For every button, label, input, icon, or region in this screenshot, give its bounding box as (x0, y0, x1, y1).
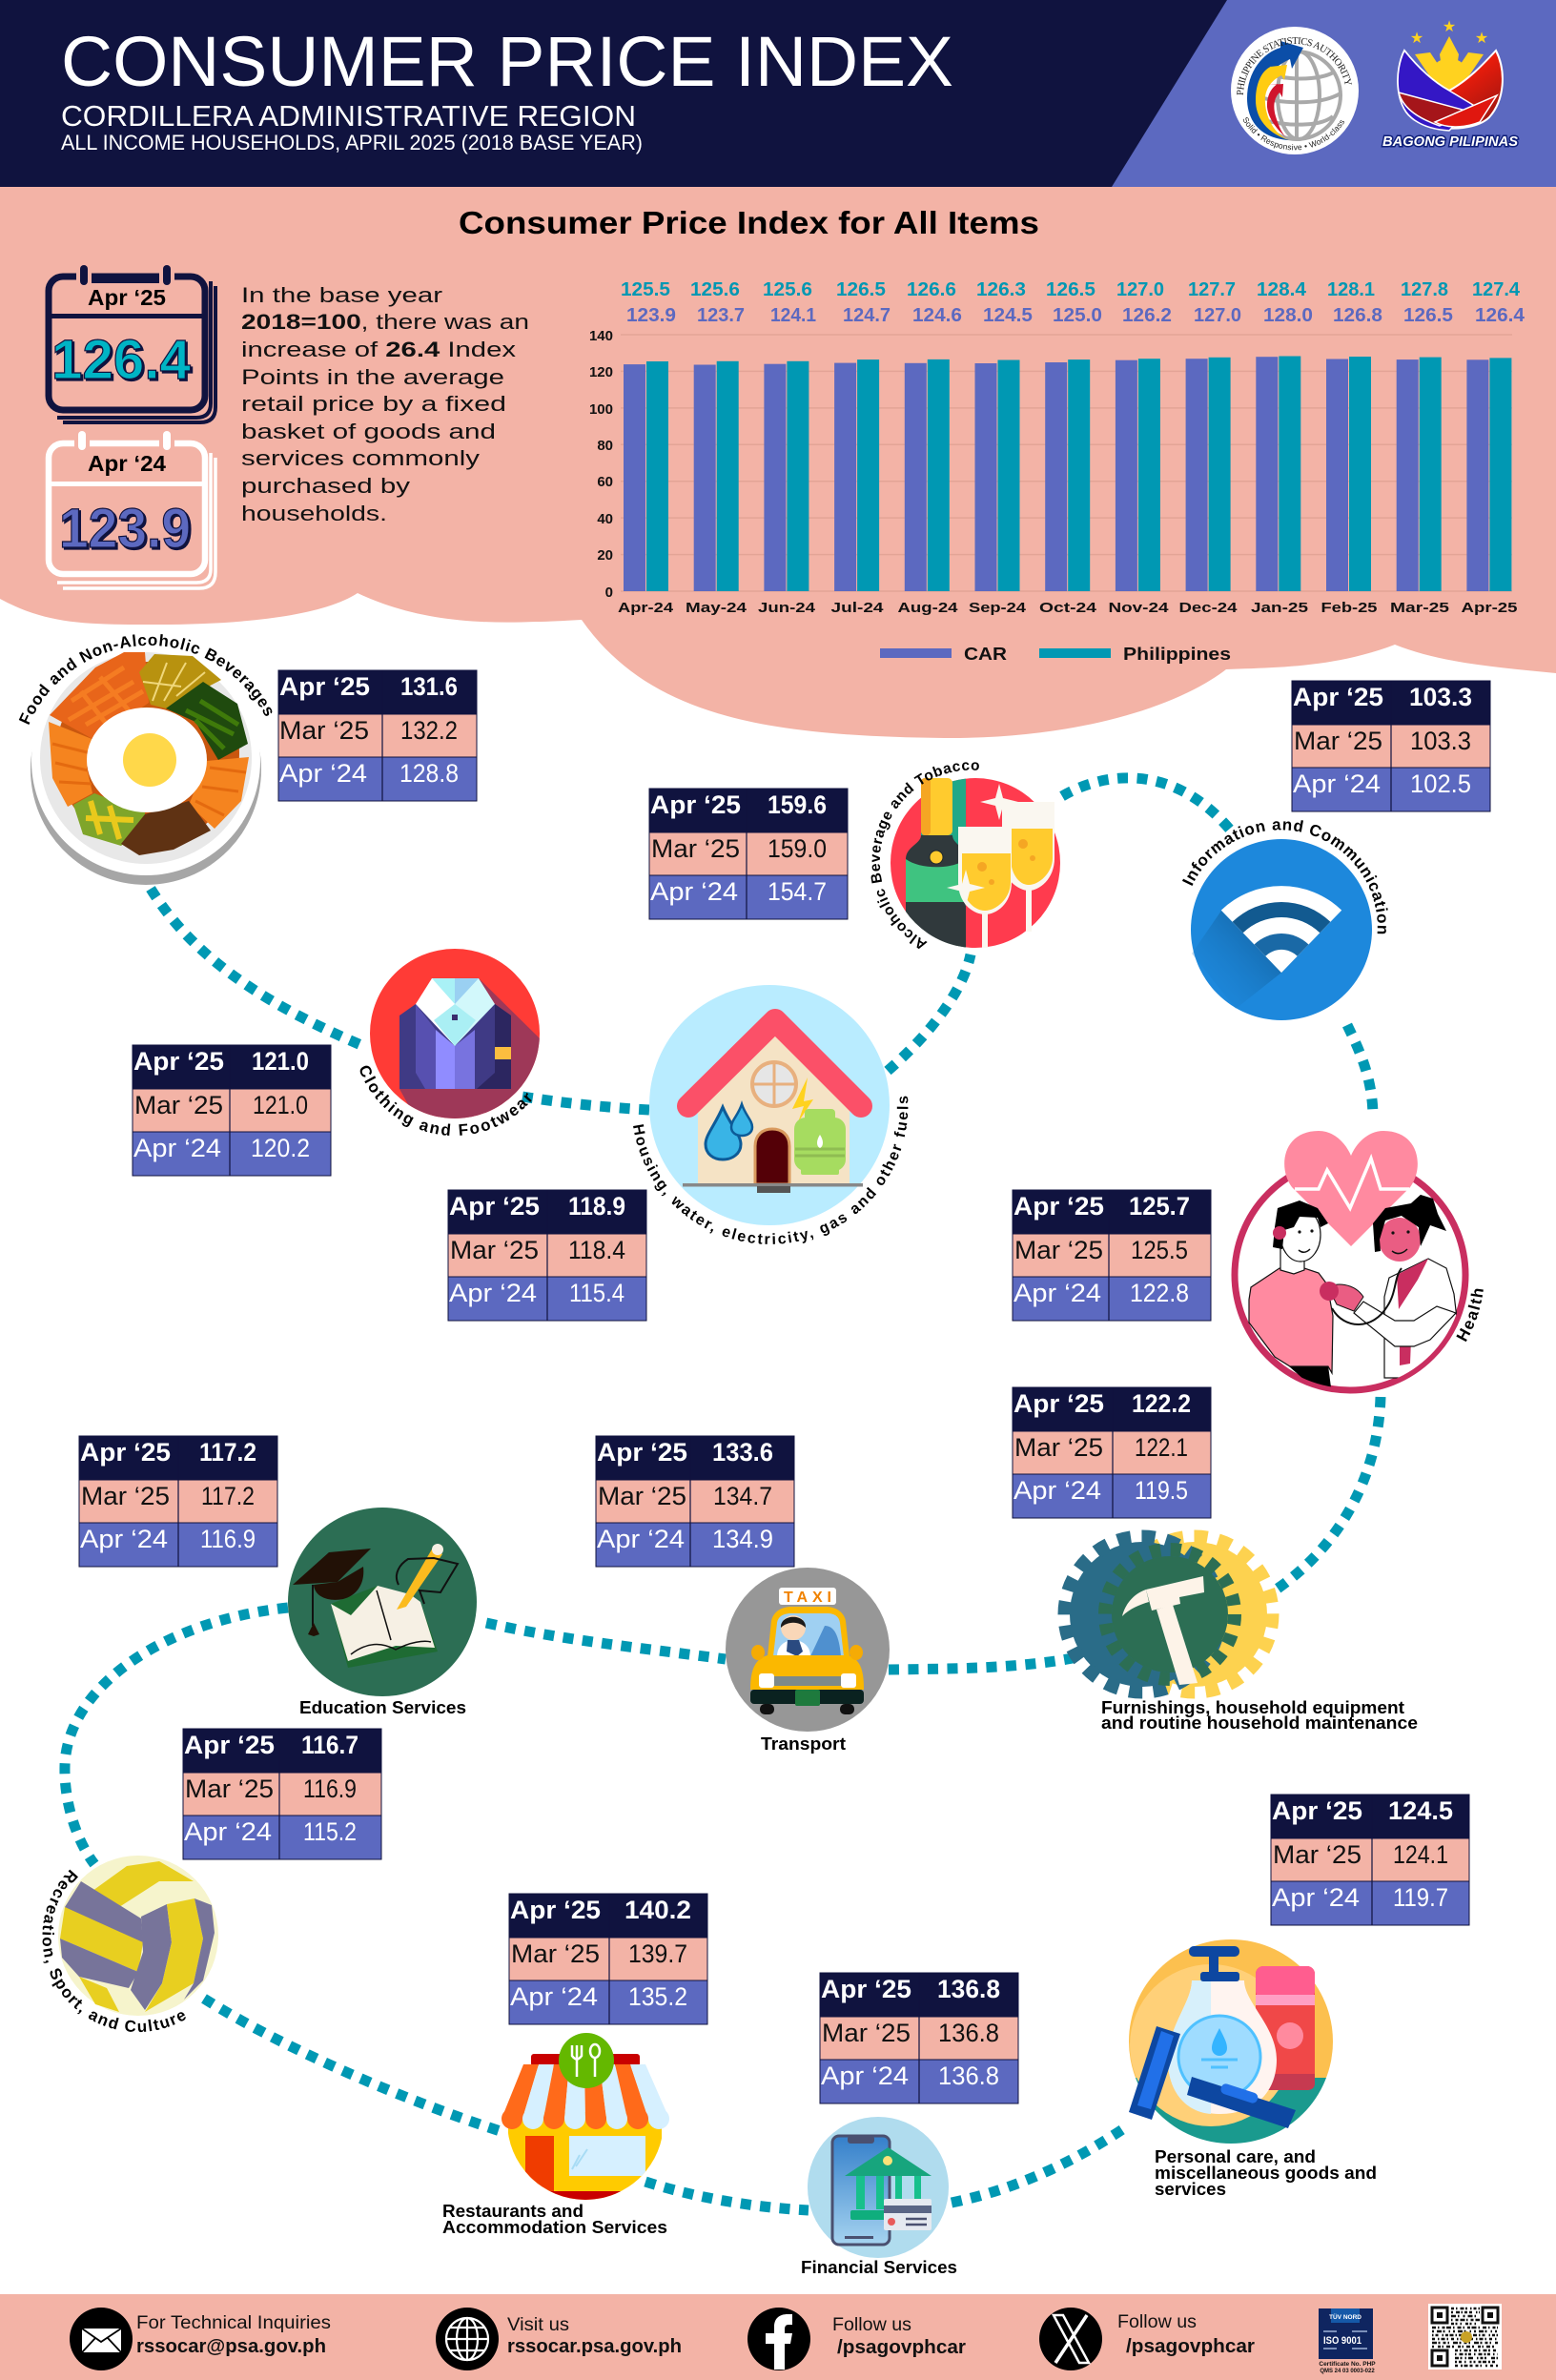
ISO certification badge: ISO 9001 (1323, 2335, 1362, 2347)
y axis labels: 80 (597, 438, 613, 454)
QR code (1428, 2304, 1502, 2370)
table: information: Apr ‘24 (1293, 769, 1381, 798)
table: clothing: 120.2 (251, 1134, 310, 1162)
data labels: Philippines: 126.6 (907, 279, 956, 300)
bars: CAR (624, 357, 1488, 591)
icon: gears and hammer (1065, 1537, 1272, 1692)
table: education (79, 1436, 277, 1567)
table: food: 128.8 (399, 759, 459, 788)
label: Alcoholic Beverage and Tobacco: Alcoholic Beverage and Tobacco (871, 762, 979, 950)
x axis labels: Apr-24 (618, 600, 674, 616)
calendar: Apr 24: 123.9 (59, 498, 191, 560)
table: transport: 134.7 (713, 1482, 772, 1510)
y axis labels: 100 (589, 401, 613, 418)
text block: base year explanation: 2018=100 , there was an (241, 310, 529, 334)
table: alcoholic beverage (649, 789, 848, 919)
label: Personal care: services (1155, 2180, 1226, 2199)
text: facebook: /psagovphcar (837, 2337, 966, 2358)
icon: food plate (31, 646, 261, 885)
table: recreation: Apr ‘24 (184, 1817, 272, 1846)
calendar: Apr 24 (49, 431, 215, 588)
data labels: Philippines: 126.5 (1046, 279, 1095, 300)
legend: CAR (964, 645, 1007, 664)
table: alcoholic beverage: Apr ‘24 (650, 877, 738, 906)
x axis labels: Aug-24 (898, 600, 958, 616)
table: financial: 136.8 (938, 2062, 999, 2090)
data labels: CAR (626, 305, 1525, 326)
table: education: Mar ‘25 (81, 1482, 170, 1510)
x axis labels: Mar-25 (1390, 600, 1449, 616)
table: financial: 136.8 (937, 1975, 1000, 2003)
data labels: Philippines: 128.1 (1327, 279, 1375, 300)
ISO certification badge: Certificate No. PHP (1319, 2361, 1376, 2368)
table: furnishings: Apr ‘25 (1013, 1389, 1104, 1418)
text block: base year explanation: In the base year (241, 283, 442, 307)
data labels: Philippines: 125.6 (690, 279, 740, 300)
subtitle: region: CORDILLERA ADMINISTRATIVE REGION (61, 99, 636, 133)
data labels: CAR: 124.5 (983, 305, 1033, 326)
table: transport: 133.6 (712, 1438, 773, 1467)
x axis labels: Jul-24 (831, 600, 884, 616)
table: furnishings (1013, 1387, 1211, 1518)
table: transport: Mar ‘25 (598, 1482, 686, 1510)
text: technical inquiries: For Technical Inquiries (136, 2313, 331, 2333)
icon: housing (649, 985, 890, 1225)
table: education: 117.2 (201, 1482, 255, 1510)
data labels: Philippines: 128.4 (1257, 279, 1307, 300)
table: financial: Apr ‘24 (821, 2062, 909, 2090)
table: housing: Mar ‘25 (450, 1236, 539, 1264)
label: Recreation, Sport, and Culture: Recreation, Sport, and Culture (42, 1869, 186, 2033)
header band (0, 0, 1556, 187)
footer band (0, 2294, 1556, 2380)
x axis labels (618, 600, 1518, 616)
text block: base year explanation: purchased by (241, 474, 410, 498)
table: recreation: Apr ‘25 (184, 1731, 275, 1759)
table: education: 117.2 (199, 1438, 256, 1467)
label: Personal care: Personal care, and (1155, 2147, 1316, 2166)
table: clothing: Apr ‘25 (133, 1047, 224, 1076)
data labels: CAR: 128.0 (1263, 305, 1313, 326)
logo: Philippine Statistics Authority: Solid • Responsive • World-class (1243, 117, 1344, 151)
x axis labels: Apr-25 (1461, 600, 1518, 616)
logo: Philippine Statistics Authority (1231, 27, 1359, 154)
label: Clothing and Footwear: Clothing and Footwear (360, 1066, 532, 1136)
ISO certification badge: TÜV NORD (1329, 2312, 1362, 2321)
table: information (1292, 681, 1490, 811)
y axis labels: 0 (605, 585, 613, 601)
label: Furnishings: and routine household maintenance (1101, 1713, 1418, 1733)
data labels: CAR: 125.0 (1053, 305, 1102, 326)
data labels: Philippines: 126.3 (976, 279, 1026, 300)
label: Furnishings: Furnishings, household equipment (1101, 1698, 1404, 1717)
table: food (278, 670, 477, 801)
icon: taxi: TAXI (784, 1590, 831, 1606)
text block: base year explanation: retail price by a fixed (241, 392, 506, 416)
table: personal care (1271, 1795, 1469, 1925)
logo: Bagong Pilipinas: ★ (1410, 29, 1423, 47)
data labels: Philippines: 125.6 (763, 279, 812, 300)
table: health: 125.5 (1131, 1236, 1188, 1264)
table: food: Apr ‘24 (279, 759, 367, 788)
calendar: Apr 25 (49, 265, 215, 422)
table: clothing: Mar ‘25 (134, 1091, 223, 1119)
table: education: Apr ‘24 (80, 1525, 168, 1553)
text block: base year explanation: services commonly (241, 446, 480, 470)
table: financial: Apr ‘25 (821, 1975, 911, 2003)
table: furnishings: 122.2 (1132, 1389, 1191, 1418)
table: clothing: 121.0 (253, 1091, 308, 1119)
x axis labels: Jun-24 (758, 600, 816, 616)
data labels: Philippines: 127.0 (1116, 279, 1164, 300)
x axis labels: May-24 (686, 600, 747, 616)
logo: Bagong Pilipinas (1382, 17, 1518, 150)
text: technical inquiries: rssocar@psa.gov.ph (136, 2336, 326, 2357)
icon: clothing (370, 949, 540, 1125)
table: education: Apr ‘25 (80, 1438, 171, 1467)
data labels: CAR: 124.1 (770, 305, 816, 326)
table: personal care: Apr ‘24 (1272, 1883, 1360, 1912)
x axis labels: Dec-24 (1178, 600, 1238, 616)
data labels: CAR: 123.9 (626, 305, 676, 326)
table: housing: 118.4 (568, 1236, 625, 1264)
logo: Bagong Pilipinas: ★ (1443, 17, 1456, 35)
label: Furnishings (1101, 1698, 1418, 1733)
label: Information and Communication: Information and Communication (1182, 820, 1388, 934)
data labels: CAR: 126.8 (1333, 305, 1382, 326)
table: recreation: 116.9 (303, 1775, 357, 1803)
table: personal care: Apr ‘25 (1272, 1796, 1362, 1825)
legend (880, 645, 1231, 664)
title: CONSUMER PRICE INDEX (61, 22, 953, 101)
data labels: Philippines (621, 279, 1521, 300)
table: information: 103.3 (1410, 727, 1471, 755)
icon: wifi (1191, 839, 1372, 1020)
data labels: Philippines: 127.4 (1472, 279, 1521, 300)
label: Food and Non-Alcoholic Beverages: Food and Non-Alcoholic Beverages (19, 634, 273, 725)
text: facebook (832, 2315, 966, 2358)
text: website: Visit us (507, 2315, 569, 2335)
table: housing: 118.9 (568, 1192, 625, 1221)
data labels: CAR: 126.2 (1122, 305, 1172, 326)
table: education: 116.9 (200, 1525, 256, 1553)
table: restaurants: Apr ‘25 (510, 1896, 601, 1924)
table: transport: 134.9 (712, 1525, 773, 1553)
label: Restaurants and Accommodation Services: Accommodation Services (442, 2218, 667, 2237)
text block: base year explanation: increase of 26.4 Index (241, 338, 516, 361)
table: clothing (133, 1045, 331, 1176)
table: information: Mar ‘25 (1294, 727, 1382, 755)
icon: globe (436, 2308, 499, 2370)
text: X (1117, 2312, 1255, 2357)
table: recreation: Mar ‘25 (185, 1775, 274, 1803)
icon: education (288, 1508, 477, 1696)
data labels: CAR: 126.4 (1475, 305, 1525, 326)
dotted connector path (65, 778, 1381, 2210)
table: alcoholic beverage: 159.6 (768, 790, 827, 819)
text: technical inquiries (136, 2313, 331, 2357)
table: food: Mar ‘25 (279, 716, 369, 745)
bars: Philippines (646, 357, 1511, 591)
table: personal care: 119.7 (1393, 1883, 1448, 1912)
text: facebook: Follow us (832, 2315, 911, 2335)
bar chart: CPI all items (589, 279, 1525, 664)
panel: all items background (0, 187, 1556, 738)
table: transport (596, 1436, 794, 1567)
data labels: CAR: 124.7 (843, 305, 891, 326)
table: recreation (183, 1729, 381, 1859)
table: personal care: 124.1 (1393, 1840, 1448, 1869)
table: recreation: 115.2 (303, 1817, 357, 1846)
table: restaurants: 135.2 (628, 1982, 687, 2011)
text block: base year explanation (241, 283, 529, 525)
table: alcoholic beverage: 154.7 (768, 877, 827, 906)
subtitle: coverage: ALL INCOME HOUSEHOLDS, APRIL 2025 (2018 BASE YEAR) (61, 131, 643, 154)
x axis labels: Nov-24 (1108, 600, 1169, 616)
icon: financial (808, 2117, 949, 2258)
data labels: CAR: 123.7 (697, 305, 745, 326)
table: restaurants: Mar ‘25 (511, 1939, 600, 1968)
label: Restaurants and Accommodation Services (442, 2202, 667, 2237)
table: restaurants: Apr ‘24 (510, 1982, 598, 2011)
label: Housing, water, electricity, gas and other fuels: Housing, water, electricity, gas and other fuels (633, 1097, 908, 1244)
table: financial: 136.8 (938, 2019, 999, 2047)
table: information: Apr ‘25 (1293, 683, 1383, 711)
icon: X (1039, 2308, 1102, 2370)
x axis labels: Feb-25 (1321, 600, 1377, 616)
table: information: 103.3 (1409, 683, 1472, 711)
icon: email (70, 2308, 133, 2370)
text: website (507, 2315, 682, 2357)
y axis labels: 20 (597, 547, 613, 564)
logo: Bagong Pilipinas: BAGONG PILIPINAS (1382, 133, 1518, 150)
table: food: 131.6 (400, 672, 458, 701)
table: health: Apr ‘24 (1013, 1279, 1101, 1307)
y axis labels: 140 (589, 328, 613, 344)
x axis labels: Oct-24 (1039, 600, 1097, 616)
table: health: Apr ‘25 (1013, 1192, 1104, 1221)
data labels: Philippines: 125.5 (621, 279, 670, 300)
table: transport: Apr ‘24 (597, 1525, 685, 1553)
table: housing: Apr ‘24 (449, 1279, 537, 1307)
label: Financial Services: Financial Services (801, 2258, 957, 2277)
icon: volleyball (58, 1856, 218, 2016)
table: clothing: 121.0 (252, 1047, 309, 1076)
data labels: Philippines: 127.8 (1401, 279, 1448, 300)
table: restaurants: 140.2 (624, 1896, 691, 1924)
table: furnishings: Apr ‘24 (1013, 1476, 1101, 1505)
x axis labels: Jan-25 (1251, 600, 1308, 616)
table: food: Apr ‘25 (279, 672, 370, 701)
table: health: 125.7 (1129, 1192, 1190, 1221)
y axis labels: 120 (589, 364, 613, 380)
table: restaurants (509, 1894, 707, 2024)
ISO certification badge (1319, 2308, 1376, 2374)
table: food: 132.2 (400, 716, 458, 745)
table: transport: Apr ‘25 (597, 1438, 687, 1467)
y axis labels (589, 328, 613, 601)
table: furnishings: Mar ‘25 (1014, 1433, 1103, 1462)
table: alcoholic beverage: 159.0 (768, 834, 827, 863)
table: housing: Apr ‘25 (449, 1192, 540, 1221)
data labels: CAR: 127.0 (1194, 305, 1241, 326)
y axis labels: 60 (597, 474, 613, 490)
calendar: Apr 24: Apr ‘24 (88, 451, 166, 476)
table: financial: Mar ‘25 (822, 2019, 911, 2047)
icon: health (1235, 1131, 1465, 1390)
data labels: Philippines: 126.5 (836, 279, 886, 300)
table: housing (448, 1190, 646, 1321)
label: Personal care (1155, 2147, 1377, 2199)
label: Restaurants and Accommodation Services: Restaurants and (442, 2202, 584, 2221)
data labels: CAR: 126.5 (1403, 305, 1453, 326)
table: financial (820, 1973, 1018, 2103)
calendar: Apr 25: 126.4 (51, 329, 191, 391)
label: Education Services: Education Services (299, 1698, 466, 1717)
label: Health: Health (1456, 1289, 1484, 1343)
table: furnishings: 122.1 (1135, 1433, 1188, 1462)
table: alcoholic beverage: Apr ‘25 (650, 790, 741, 819)
logo: Bagong Pilipinas: ★ (1475, 29, 1488, 47)
table: personal care: Mar ‘25 (1273, 1840, 1362, 1869)
table: personal care: 124.5 (1388, 1796, 1453, 1825)
y axis labels: 40 (597, 511, 613, 527)
x axis labels: Sep-24 (969, 600, 1027, 616)
text: X: Follow us (1117, 2312, 1197, 2332)
label: Transport: Transport (761, 1734, 846, 1754)
label: Personal care: miscellaneous goods and (1155, 2164, 1377, 2183)
table: health (1013, 1190, 1211, 1321)
table: furnishings: 119.5 (1135, 1476, 1188, 1505)
text block: base year explanation: households. (241, 502, 387, 525)
table: housing: 115.4 (569, 1279, 624, 1307)
table: clothing: Apr ‘24 (133, 1134, 221, 1162)
ISO certification badge: QMS 24 03 0003-022 (1320, 2369, 1375, 2374)
icon: taxi (726, 1568, 890, 1732)
table: health: 122.8 (1130, 1279, 1189, 1307)
icon: facebook (747, 2308, 810, 2370)
icon: personal care (1129, 1939, 1334, 2149)
text block: base year explanation: basket of goods and (241, 420, 496, 443)
table: health: Mar ‘25 (1014, 1236, 1103, 1264)
text: X: /psagovphcar (1126, 2336, 1255, 2357)
table: restaurants: 139.7 (628, 1939, 687, 1968)
icon: restaurant (502, 2033, 669, 2203)
heading: Consumer Price Index for All Items: Consumer Price Index for All Items (459, 205, 1039, 240)
table: information: 102.5 (1410, 769, 1471, 798)
data labels: CAR: 124.6 (912, 305, 962, 326)
data labels: Philippines: 127.7 (1188, 279, 1236, 300)
text block: base year explanation: Points in the average (241, 365, 504, 389)
table: recreation: 116.7 (301, 1731, 358, 1759)
legend: Philippines (1123, 645, 1231, 664)
logo: Philippine Statistics Authority: PHILIPPINE STATISTICS AUTHORITY (1237, 37, 1352, 95)
text: website: rssocar.psa.gov.ph (507, 2336, 682, 2357)
icon: alcoholic beverage (891, 772, 1060, 952)
calendar: Apr 25: Apr ‘25 (88, 285, 166, 310)
table: alcoholic beverage: Mar ‘25 (651, 834, 740, 863)
